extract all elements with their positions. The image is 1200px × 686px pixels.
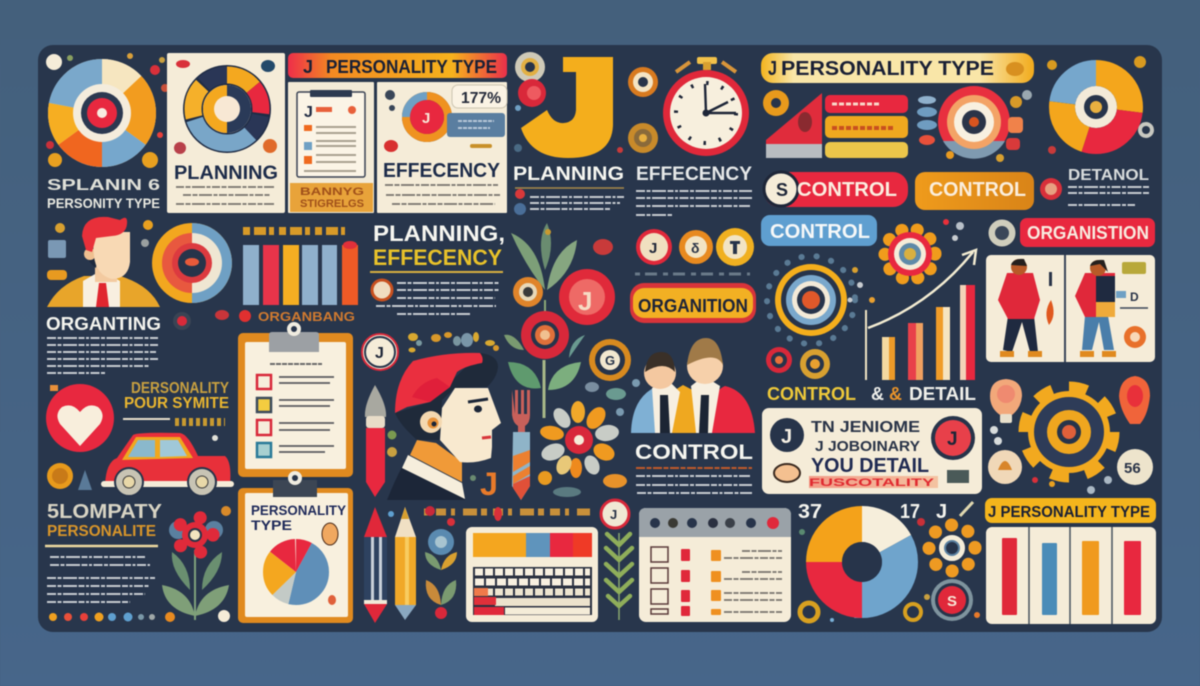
heading: detail: DETANOL: [1068, 167, 1149, 184]
number: 37: [798, 501, 822, 523]
panel: J detail card: FUSCOTALITY: [809, 477, 935, 489]
panel: efficiency card: J: [422, 110, 430, 127]
text lines: [636, 191, 752, 215]
icon: daisy flower: [538, 401, 627, 497]
icon: red flower: [521, 311, 569, 359]
text lines: [385, 185, 500, 204]
decor: confetti above head: [408, 332, 499, 352]
panel: pie clipboard: [238, 471, 353, 623]
text block: personality: DERSONALITY: [131, 380, 229, 397]
icon: man: [47, 217, 160, 307]
icon: G ring: [589, 339, 631, 381]
badge: organisation red: [988, 218, 1155, 247]
icon: J circle and fern: J: [610, 507, 617, 522]
panel: clipboard card: J: [304, 104, 313, 121]
heading: control: CONTROL: [635, 441, 753, 464]
label: organizing small: ORGANBANG: [258, 309, 355, 324]
icon: three coins: J: [649, 240, 657, 257]
text: control and detail: CONTROL: [767, 384, 856, 404]
banner: J personality type lower: J PERSONALITY TYPE: [988, 504, 1150, 521]
panel: J detail card: TN JENIOME: [811, 419, 920, 436]
banner: J personality type: PERSONALITY TYPE: [326, 57, 497, 77]
panel: J detail card: [762, 408, 982, 494]
text lines: [47, 338, 158, 373]
icon: heart: [46, 384, 114, 452]
heading: efficiency dark: EFFECENCY: [636, 164, 752, 185]
icon: J badge: [559, 269, 615, 325]
decor strip with small flower: [424, 506, 590, 619]
panel: clipboard card: BANNYG: [300, 186, 364, 198]
icon: car: [47, 433, 234, 496]
text: control and detail: &: [889, 384, 902, 404]
text: control and detail: &: [871, 384, 884, 404]
icon: orange flower and S badge: S: [947, 593, 957, 610]
icon: J circle and fern: [601, 500, 632, 620]
chart: segmented target: [61, 72, 143, 154]
text block: personality: [123, 380, 229, 441]
bar chart: growth with arrow: [866, 250, 976, 380]
badge: control blue: CONTROL: [770, 221, 870, 243]
panel: clipboard card: [288, 82, 374, 213]
badge: organisation yellow: [630, 283, 756, 323]
checklist items: [257, 375, 271, 457]
illustration: head profile: [387, 353, 501, 502]
panel: J detail card: YOU DETAIL: [811, 455, 929, 477]
panel: checklist clipboard: [238, 322, 353, 477]
icon: fork: [512, 390, 530, 500]
checklist rows: [651, 547, 668, 614]
text block: summary: [45, 501, 163, 602]
badge: control orange: [915, 172, 1034, 210]
illustration: plant with J badge: [504, 223, 640, 418]
badge: 56: [1117, 449, 1153, 485]
chart: big pie top right: [1047, 56, 1154, 154]
heading: TYPE: [251, 517, 292, 533]
panel: planning card: [167, 53, 285, 213]
text lines: [1040, 178, 1150, 205]
icon: flower with leaves: [162, 506, 231, 622]
banner: J personality type lower: [985, 498, 1156, 523]
panel: organizing man: [46, 217, 161, 373]
icon: target with dot ring: [766, 256, 875, 379]
badge: 56: 56: [1124, 460, 1141, 477]
bar chart: colored bars: [243, 231, 358, 305]
badge: organisation yellow: ORGANITION: [638, 296, 748, 316]
badge: control orange: CONTROL: [929, 179, 1026, 201]
label: J: [936, 501, 947, 523]
icon: big J: [514, 52, 623, 158]
icon: G ring: G: [605, 353, 615, 368]
chart: organizing ring: [152, 223, 232, 330]
icon: paint brush: [365, 385, 397, 497]
banner: J personality type right: [761, 53, 1034, 83]
text block: summary: 5LOMPATY: [47, 501, 163, 523]
icon: three coins: δ: [691, 240, 700, 256]
icon: layered arrow stack: [763, 90, 908, 158]
icon: person right: [1075, 260, 1126, 357]
icon: yellow pencil: [395, 507, 416, 620]
heading: PERSONALITY: [251, 502, 347, 518]
text block: personality: POUR SYMITE: [124, 395, 229, 412]
panel: J detail card: J JOBOINARY: [815, 438, 920, 455]
text lines: [514, 188, 624, 215]
icon: J badge: J: [578, 286, 592, 316]
banner: J personality type right: J: [768, 58, 777, 80]
panel: keyboard card: [466, 527, 598, 622]
label: J orange: J: [480, 466, 498, 502]
icon: bulb right: [1119, 376, 1150, 424]
banner: J personality type: J: [303, 57, 313, 77]
arrow: growth: [868, 250, 976, 328]
heading: PERSONITY TYPE: [47, 195, 160, 211]
panel: J detail card: J: [947, 429, 958, 450]
text block: planning efficiency: EFFECENCY: [373, 245, 502, 270]
icon: three coins: [635, 228, 754, 274]
heading: planning dark: PLANNING: [513, 164, 624, 185]
icon: person left: [998, 259, 1042, 357]
heading: efficiency: EFFECENCY: [383, 160, 501, 182]
orange label: [290, 183, 373, 212]
text: control and detail: [767, 384, 976, 404]
icon: pencils: [364, 507, 416, 623]
text block: planning efficiency: [370, 221, 505, 314]
icon: J circle: [362, 334, 398, 370]
heading: SPLANIN 6: [47, 177, 160, 194]
heading: planning: PLANNING: [174, 163, 278, 184]
icon: orange flower and S badge: [917, 518, 980, 621]
panel: efficiency card: [377, 82, 507, 213]
banner: J personality type right: PERSONALITY TYPE: [781, 58, 994, 80]
badge: control red: CONTROL: [797, 179, 897, 201]
badge: control red: S: [776, 180, 788, 200]
text block: summary: PERSONALITE: [47, 523, 156, 540]
chart: central ring with pills: [917, 86, 1032, 162]
panel: efficiency card: 177%: [461, 90, 501, 107]
panel: four bars card: [986, 527, 1156, 624]
text lines: [176, 187, 274, 204]
illustration: two men: [631, 338, 755, 433]
pie chart: [280, 556, 312, 588]
panel: people card: D: [1130, 290, 1139, 304]
banner: J personality type: [288, 53, 507, 78]
icon: stopwatch: [628, 57, 749, 156]
panel: browser checklist: [639, 508, 791, 622]
chart: planning ring: [193, 75, 261, 143]
badge: organisation red: ORGANISTION: [1027, 223, 1149, 243]
chart: donut pie: [798, 501, 973, 622]
dots row: [49, 612, 175, 622]
text block: planning efficiency: PLANNING,: [373, 221, 505, 246]
panel: people card: [986, 255, 1155, 362]
icon: sun flower: [885, 219, 964, 279]
heading: organizing: ORGANTING: [46, 314, 161, 334]
icon: bulb left: [990, 379, 1022, 423]
icon: gear with bulbs: [988, 376, 1153, 494]
text lines: [636, 468, 752, 493]
badge: control blue: [761, 215, 877, 246]
panel: J detail card: J: [781, 426, 792, 448]
number: 17: [900, 501, 920, 523]
icon: J circle: J: [375, 345, 384, 362]
text: control and detail: DETAIL: [909, 384, 976, 404]
panel: clipboard card: STIGRELGS: [300, 198, 364, 210]
panel: planning target chart and title: [46, 53, 169, 211]
badge: control red: [764, 172, 908, 207]
